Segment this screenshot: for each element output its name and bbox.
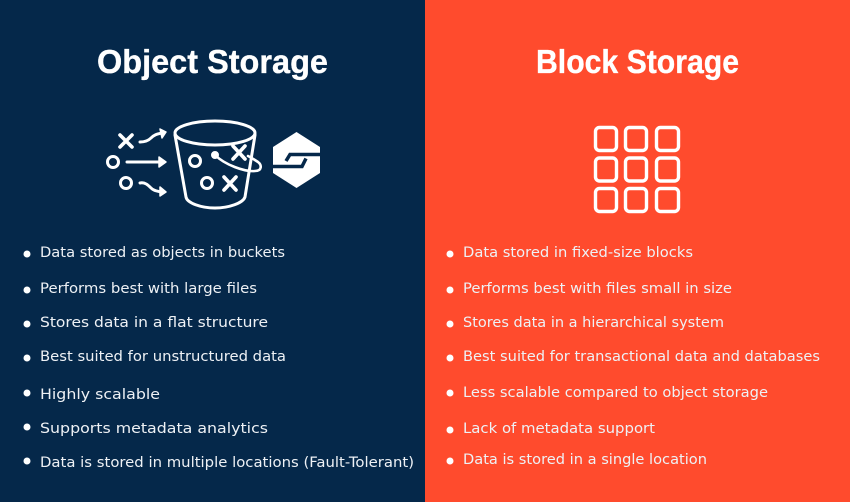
list: object storage traits: Data is stored in multiple locations (Fault-Tolerant) bbox=[40, 454, 414, 471]
list: block storage traits: Lack of metadata support bbox=[463, 420, 655, 437]
list: object storage traits bbox=[24, 244, 414, 471]
list: object storage traits: Data stored as objects in buckets bbox=[40, 244, 285, 261]
list: block storage traits: Less scalable compared to object storage bbox=[463, 384, 768, 401]
list: object storage traits: Best suited for unstructured data bbox=[40, 348, 286, 365]
list: block storage traits bbox=[446, 244, 820, 468]
panel: object storage bbox=[0, 0, 425, 502]
list: block storage traits: Data stored in fixed-size blocks bbox=[463, 244, 693, 261]
list: block storage traits: Performs best with files small in size bbox=[463, 280, 732, 297]
list: block storage traits: Stores data in a hierarchical system bbox=[463, 314, 724, 331]
icon: block grid bbox=[596, 128, 678, 212]
list: object storage traits: Performs best with large files bbox=[40, 280, 257, 297]
heading: block storage: Block Storage bbox=[536, 44, 739, 81]
icon: hexagon logo bbox=[272, 132, 321, 188]
list: object storage traits: Supports metadata analytics bbox=[40, 420, 268, 437]
list: object storage traits: Stores data in a flat structure bbox=[40, 314, 268, 331]
heading: object storage: Object Storage bbox=[97, 44, 328, 81]
icon: object storage bucket bbox=[108, 121, 261, 208]
list: block storage traits: Data is stored in a single location bbox=[463, 451, 707, 468]
list: block storage traits: Best suited for transactional data and databases bbox=[463, 348, 820, 365]
panel: block storage bbox=[425, 0, 850, 502]
list: object storage traits: Highly scalable bbox=[40, 386, 160, 403]
